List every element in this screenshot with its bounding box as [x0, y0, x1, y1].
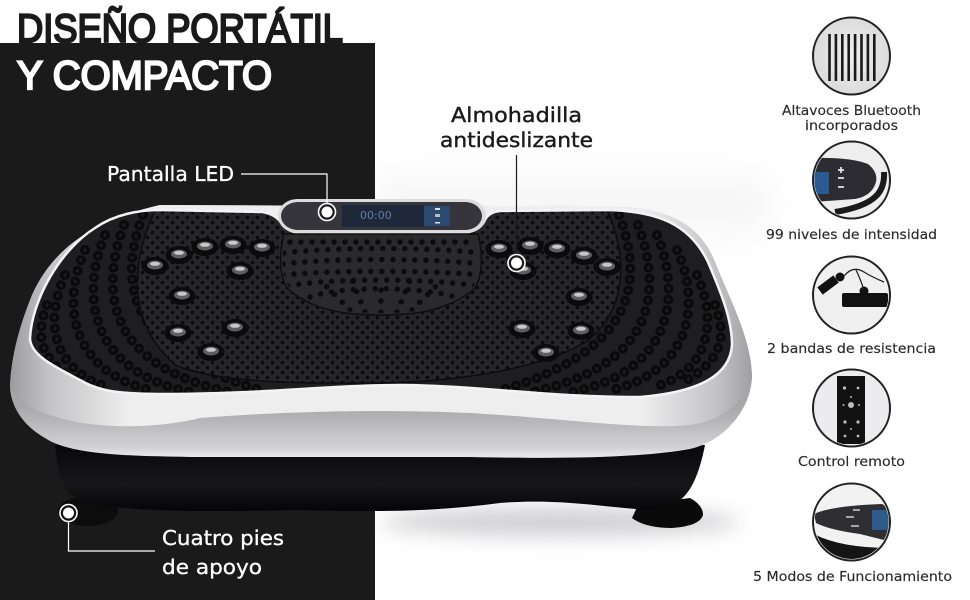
dark left panel — [0, 43, 375, 600]
massage magnets — [142, 236, 620, 362]
feature: 5 Modos de Funcionamiento: 5 Modos de Funcionamiento — [753, 570, 952, 585]
icon: resistance bands — [813, 256, 890, 334]
feature: 2 bandas de resistencia: 2 bandas de resistencia — [767, 342, 936, 357]
icon: control panel close-up — [813, 484, 892, 570]
feature: 5 Modos de Funcionamiento — [753, 484, 952, 585]
feature: Altavoces Bluetooth — [782, 18, 921, 134]
callout: Cuatro pies de apoyo: Cuatro pies — [162, 526, 284, 550]
background soft shading — [375, 175, 770, 536]
icon: speaker grille — [813, 18, 890, 94]
feature: 99 niveles de intensidad: 99 niveles de intensidad — [766, 228, 937, 243]
title line: DISEÑO PORTÁTIL: DISEÑO PORTÁTIL — [17, 6, 343, 51]
feature: Altavoces Bluetooth: Altavoces Bluetooth — [782, 104, 921, 119]
centre pad — [281, 234, 481, 315]
silver shell — [10, 205, 752, 458]
callout: Almohadilla antideslizante: Almohadilla — [451, 103, 582, 127]
callout: Cuatro pies de apoyo: de apoyo — [162, 555, 262, 579]
LED display panel — [278, 199, 486, 233]
icon: intensity buttons close-up — [812, 142, 890, 218]
icon: remote control — [813, 370, 890, 446]
feature: Control remoto — [798, 370, 905, 470]
callout: Cuatro pies de apoyo — [60, 504, 284, 579]
callout: Pantalla LED — [107, 162, 336, 220]
feature: 2 bandas de resistencia — [767, 256, 936, 357]
black textured mat — [30, 210, 732, 397]
title line: Y COMPACTO: Y COMPACTO — [17, 54, 272, 98]
feature: 99 niveles de intensidad — [766, 142, 937, 243]
callout: Almohadilla antideslizante — [440, 103, 593, 272]
product: vibration platform — [10, 199, 752, 528]
feature: Altavoces Bluetooth: incorporados — [805, 119, 898, 134]
callout: Almohadilla antideslizante: antideslizante — [440, 128, 593, 152]
callout: Pantalla LED: Pantalla LED — [107, 162, 234, 186]
feature: Control remoto: Control remoto — [798, 455, 905, 470]
LED display panel: 00:00 — [360, 209, 392, 222]
base and feet — [55, 445, 705, 528]
